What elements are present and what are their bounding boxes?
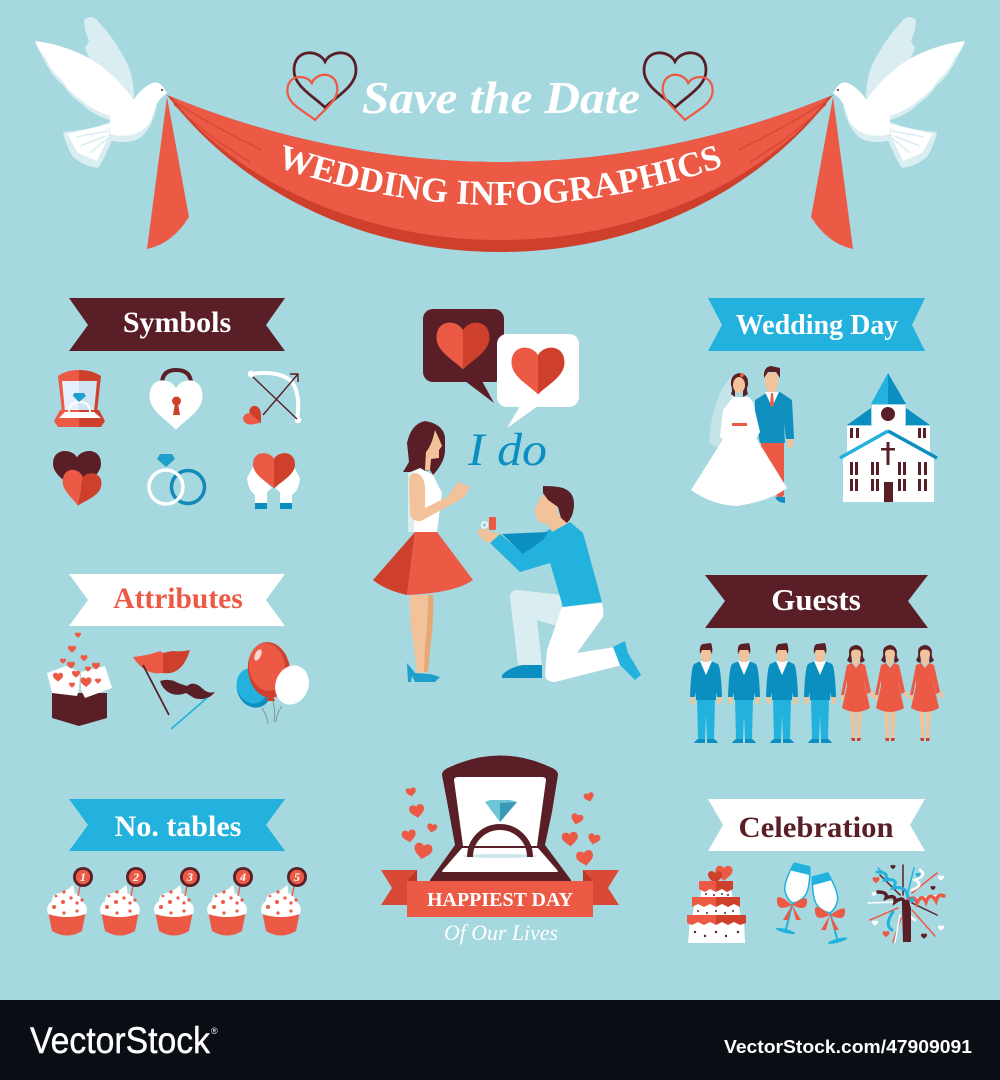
icon: gift box with hearts	[47, 632, 112, 726]
icon: two hearts	[53, 451, 103, 509]
ribbon: Wedding Day: Wedding Day	[736, 310, 898, 341]
speech bubble: white heart	[497, 334, 579, 428]
emblem ribbon	[381, 870, 417, 905]
banner tail right	[811, 97, 853, 249]
ribbon: Symbols	[69, 298, 285, 351]
ribbon: Guests: Guests	[771, 582, 861, 617]
icon: wedding rings	[149, 454, 204, 504]
emblem hearts	[401, 787, 601, 867]
cupcake 2: 2	[132, 870, 139, 884]
script heading: Save the Date: Save the Date	[362, 73, 640, 123]
cupcake 3: 3	[186, 870, 193, 884]
figure: kneeling man	[477, 486, 641, 682]
cupcake 5: 5	[294, 870, 300, 884]
icon: outline hearts right	[644, 53, 714, 122]
cupcake 5	[261, 867, 307, 936]
guests: groomsmen	[690, 643, 836, 743]
banner title	[262, 161, 738, 205]
cupcake 2	[100, 867, 146, 936]
script text: I do: I do	[467, 424, 547, 476]
icon: outline hearts left	[286, 53, 356, 122]
guests: bridesmaids	[841, 645, 944, 741]
emblem text: HAPPIEST DAY	[427, 889, 574, 911]
ribbon: Guests	[705, 575, 928, 628]
icon: bow and arrow	[241, 371, 301, 431]
cupcake 4: 4	[239, 870, 246, 884]
emblem ring	[470, 827, 530, 857]
ribbon: Attributes: Attributes	[113, 583, 243, 615]
ribbon: Celebration	[708, 799, 925, 851]
emblem: ring box with ribbon	[381, 756, 619, 917]
icon: heart padlock	[150, 370, 202, 430]
figure: woman	[373, 421, 473, 682]
banner: title ribbon	[147, 95, 853, 252]
emblem box	[430, 756, 571, 885]
icon: balloons	[231, 639, 314, 724]
footer URL: VectorStock.com/47909091	[724, 1037, 972, 1057]
ribbon: Symbols: Symbols	[123, 306, 231, 339]
banner tail left	[147, 97, 189, 249]
figure: bride and groom	[691, 366, 794, 506]
dove: left	[35, 17, 167, 168]
script text: Of Our Lives: Of Our Lives	[444, 920, 558, 945]
cupcake 1	[47, 867, 93, 936]
banner drape	[167, 95, 833, 252]
icon: ring box	[54, 370, 105, 427]
cupcake 1: 1	[80, 870, 86, 884]
ribbon: No. tables: No. tables	[115, 810, 241, 843]
icon: champagne confetti burst	[868, 865, 944, 942]
footer registered mark: ®	[211, 1026, 218, 1036]
footer logo text: VectorStock	[30, 1020, 210, 1061]
ribbon: No. tables	[69, 799, 285, 851]
speech bubble: maroon heart	[423, 309, 504, 403]
cupcake 4	[207, 867, 253, 936]
ribbon: Celebration: Celebration	[738, 811, 894, 844]
footer bar	[0, 1000, 1000, 1080]
banner: title ribbon: WEDDING INFOGRAPHICS	[283, 144, 720, 205]
cupcake 3	[154, 867, 200, 936]
ribbon: Attributes	[69, 574, 285, 626]
icon: champagne glasses with bows	[774, 862, 849, 946]
icon: wedding cake	[687, 866, 746, 943]
icon: church	[840, 373, 937, 502]
ribbon: Wedding Day	[708, 298, 925, 351]
icon: lips and moustache props	[133, 650, 215, 729]
icon: hands holding heart	[247, 453, 300, 509]
dove: right	[833, 17, 965, 168]
